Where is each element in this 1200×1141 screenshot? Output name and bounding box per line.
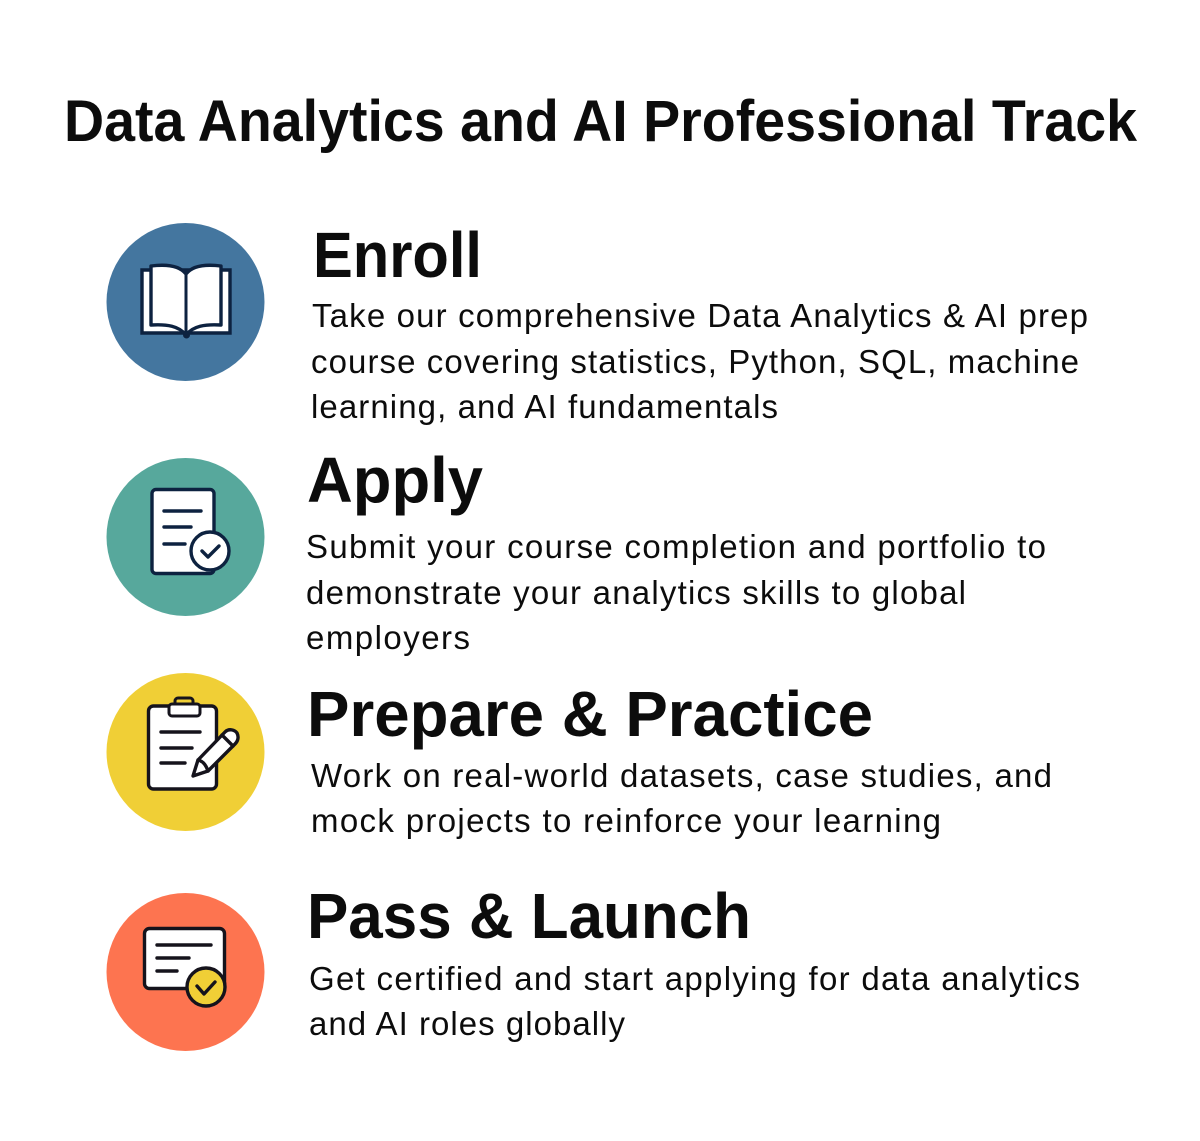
icon: document with check bbox=[106, 458, 264, 616]
description: Pass & Launch bbox=[309, 960, 1080, 1042]
step 3: Prepare & Practice bbox=[106, 673, 1052, 839]
heading: Pass & Launch: Pass & Launch bbox=[307, 880, 751, 952]
heading: Apply: Apply bbox=[307, 444, 483, 516]
description: Prepare & Practice bbox=[311, 757, 1052, 839]
description: Apply bbox=[306, 528, 1046, 656]
description: Prepare & Practice: Work on real-world datasets, case studies, and bbox=[311, 757, 1052, 794]
icon: certificate with check bbox=[106, 893, 264, 1051]
step 1: Enroll bbox=[106, 219, 1088, 425]
description: Enroll bbox=[311, 297, 1088, 425]
description: Enroll: Take our comprehensive Data Analytics & AI prep bbox=[312, 297, 1088, 334]
description: Enroll: course covering statistics, Python, SQL, machine bbox=[311, 343, 1079, 380]
description: Enroll: learning, and AI fundamentals bbox=[311, 388, 778, 425]
description: Apply: demonstrate your analytics skills to global bbox=[306, 574, 966, 611]
description: Apply: employers bbox=[306, 619, 470, 656]
description: Prepare & Practice: mock projects to reinforce your learning bbox=[311, 802, 941, 839]
icon: clipboard with pencil bbox=[106, 673, 264, 831]
description: Apply: Submit your course completion and portfolio to bbox=[306, 528, 1046, 565]
title: Data Analytics and AI Professional Track bbox=[64, 89, 1138, 154]
step 2: Apply bbox=[106, 444, 1046, 656]
description: Pass & Launch: Get certified and start applying for data analytics bbox=[309, 960, 1080, 997]
description: Pass & Launch: and AI roles globally bbox=[309, 1005, 626, 1042]
step 4: Pass & Launch bbox=[106, 880, 1080, 1051]
heading: Enroll: Enroll bbox=[313, 219, 482, 291]
heading: Prepare & Practice: Prepare & Practice bbox=[307, 678, 873, 750]
icon: open book bbox=[106, 223, 264, 381]
